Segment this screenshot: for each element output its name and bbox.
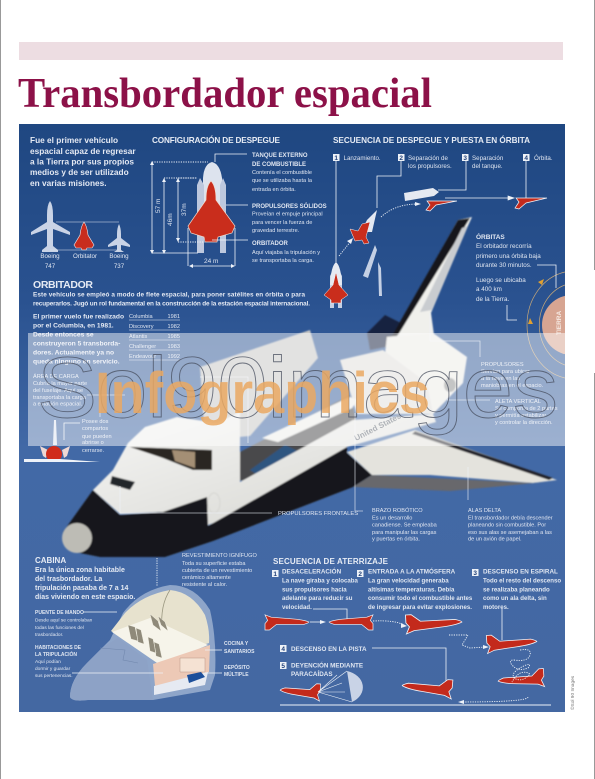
intro text: Fue el primer vehículo — [30, 135, 118, 145]
step 1: 1 — [334, 155, 338, 162]
text: órbitas: El orbitador recorría — [476, 243, 532, 250]
text: propulsores — [481, 362, 558, 426]
label: alas delta: eso sus alas se asemejaban a las — [468, 530, 552, 536]
external tank — [203, 162, 222, 228]
icon: orbiter small — [74, 222, 94, 250]
text: propulsores: Servían para ubicar — [481, 369, 530, 375]
text: órbitas: primero una órbita baja — [476, 253, 541, 260]
text: área de carga — [33, 373, 112, 454]
wing underside — [353, 475, 556, 491]
launch stack small — [324, 262, 348, 308]
step 1 — [333, 154, 381, 162]
aircraft labels: 737 — [114, 263, 125, 270]
text: propulsores: Se componía de 2 partes — [495, 406, 558, 412]
aircraft labels: Boeing — [40, 253, 60, 260]
configuration labels — [252, 153, 327, 264]
configuration labels: PROPULSORES SÓLIDOS — [252, 202, 327, 210]
cabin labels: Aquí podían — [35, 659, 61, 665]
launch sequence diagram — [324, 154, 553, 308]
landing sequence diagram — [265, 609, 551, 705]
step 3: del tanque. — [472, 163, 503, 170]
table: orbiters by year: 1982 — [168, 324, 180, 330]
cabin labels: SANITARIOS — [224, 649, 255, 655]
step 2: Separación de — [408, 155, 448, 162]
black belly — [63, 447, 372, 557]
step 4: 4 — [281, 646, 285, 653]
orbits — [527, 272, 565, 378]
step 4: DESCENSO EN LA PISTA — [291, 646, 367, 653]
size reference lines — [50, 222, 119, 250]
kitchen shelves — [180, 658, 205, 672]
cabin labels: COCINA Y — [224, 641, 249, 647]
solid boosters — [197, 178, 226, 253]
parachute — [318, 671, 363, 702]
cabin labels: sus pertenencias. — [35, 673, 73, 679]
orbiter: on runway approach — [401, 676, 453, 699]
earth label: TIERRA — [556, 310, 563, 335]
orbiter: turned around — [329, 615, 373, 630]
step 5: PARACAÍDAS — [291, 669, 333, 678]
flight deck floor — [112, 618, 208, 665]
leader lines — [212, 154, 248, 240]
heading: configuración de despegue: CONFIGURACIÓN DE DESPEGUE — [152, 134, 281, 145]
spiral — [510, 650, 530, 682]
photo: space shuttle orbiter — [62, 217, 557, 557]
falling boosters — [363, 245, 382, 296]
orbiter — [188, 181, 235, 242]
text: órbitas: de la Tierra. — [476, 296, 509, 303]
table: orbiters by year: 1983 — [168, 344, 180, 350]
configuration labels: TANQUE EXTERNO — [252, 153, 308, 159]
landing step 2 — [357, 566, 473, 611]
configuration labels: DE COMBUSTIBLE — [252, 162, 306, 168]
label: alas delta: planeando sin combustible. Por — [468, 522, 546, 528]
watermark band — [28, 333, 565, 446]
intro text: espacial capaz de regresar — [30, 146, 136, 156]
icon: orbiter front view — [24, 420, 100, 462]
label: alas delta: ALAS DELTA — [468, 508, 501, 514]
dimensions: 24 m — [204, 258, 218, 265]
text: first flight: Desde entonces se — [33, 332, 94, 338]
text: cabina: CABINA — [35, 556, 66, 565]
delta wing — [347, 430, 557, 483]
text: first flight — [33, 314, 124, 366]
step 4: Órbita. — [534, 155, 553, 162]
nose cap — [62, 523, 92, 553]
diagram: cabin cutaway — [70, 585, 222, 701]
lower storage — [154, 672, 208, 695]
photo leader lines — [87, 313, 490, 513]
flight paths — [310, 621, 323, 623]
dimensions: 57 m — [155, 199, 162, 213]
orbiter: atmosphere entry — [405, 612, 462, 634]
text: orbitador: ORBITADOR — [33, 279, 93, 291]
icon: Boeing 737 — [108, 224, 130, 252]
label: brazo robótico: Es un desarrollo — [372, 516, 412, 522]
step 4: 4 — [524, 155, 528, 162]
text: orbitador: recuperarlos. Jugó un rol fundamental en la construcción de la estación espacial internacional. — [33, 300, 310, 308]
text: área de carga: que pueden — [82, 434, 112, 440]
step 2: 2 — [399, 155, 403, 162]
text: área de carga: compartos — [82, 426, 108, 432]
configuration labels: entrada en órbita. — [252, 187, 296, 193]
dimensions: 37m — [181, 203, 188, 216]
text: propulsores: ALETA VERTICAL — [495, 399, 541, 405]
nose section — [70, 638, 153, 701]
step 3: 3 — [463, 155, 467, 162]
dome interior — [111, 590, 209, 660]
text: cabina: tripulación pasaba de 7 a 14 — [35, 585, 128, 592]
cabin labels: Desde aquí se controlaban — [35, 618, 93, 624]
text: propulsores: y permitía estabilizar — [495, 413, 546, 419]
text: área de carga: del fuselaje. Aquí se — [33, 388, 83, 394]
text: área de carga: Cubría la mayor parte — [33, 381, 87, 387]
cabin labels: DEPÓSITO — [224, 663, 250, 671]
landing step 2: ENTRADA A LA ATMÓSFERA — [368, 566, 456, 576]
label: brazo robótico: y puertas en órbita. — [372, 536, 420, 542]
watermark right notch — [565, 270, 595, 373]
step 2 — [398, 154, 452, 170]
rising shuttle — [350, 210, 377, 244]
landing step 3: 3 — [473, 570, 477, 577]
leader lines — [72, 612, 222, 673]
aircraft labels: Orbitator — [73, 253, 97, 260]
watermark outlined text: Sol90images — [37, 340, 558, 436]
seats — [128, 614, 168, 658]
text: orbitador — [33, 279, 310, 308]
table: orbiters by year: Atlantis — [129, 334, 148, 340]
aircraft labels: 747 — [45, 263, 56, 270]
text: órbitas — [476, 232, 541, 303]
label: brazo robótico — [372, 507, 438, 542]
body hatch ring — [208, 493, 220, 513]
orbiter after tank separation — [426, 201, 457, 211]
label: brazo robótico: para manipular las cargas — [372, 530, 437, 536]
storage bags — [187, 672, 205, 683]
text: órbitas: a 400 km — [476, 286, 502, 293]
arrow to orbit — [445, 196, 514, 200]
forward windows — [110, 476, 135, 490]
text: área de carga: cerrarse. — [82, 448, 105, 454]
label: revestimiento ignífugo: REVESTIMIENTO IGNÍFUGO — [182, 552, 257, 559]
text: first flight: por el Columbia, en 1981. — [33, 322, 114, 330]
label: brazo robótico: canadiense. Se empleaba — [372, 522, 438, 528]
earth — [542, 296, 565, 354]
cabin labels: dormir y guardar — [35, 666, 71, 672]
text: orbitador: Este vehículo se empleó a modo de flete espacial, para poner satélites en órbita o para — [33, 292, 305, 298]
configuration labels: Proveían el empuje principal — [252, 212, 323, 218]
cabin labels: MÚLTIPLE — [224, 671, 249, 678]
orbiter: parachute landing — [280, 681, 321, 701]
label: revestimiento ignífugo: resistente al calor. — [182, 582, 228, 588]
table: orbiters by year: Endeavour — [129, 354, 156, 360]
table: orbiters by year: 1992 — [168, 354, 180, 360]
text: área de carga: a estación espacial. — [33, 402, 83, 408]
landing step 1: velocidad. — [282, 604, 312, 611]
intro text: a la Tierra por sus propios — [30, 156, 134, 166]
runway — [280, 704, 551, 706]
size comparison: aircraft — [31, 201, 130, 270]
cabin labels: HABITACIONES DE — [35, 645, 82, 651]
label: revestimiento ignífugo: Toda su superficie estaba — [182, 561, 246, 567]
text: propulsores: maniobras en el espacio. — [481, 383, 544, 389]
text: first flight: construyeron 5 transborda- — [33, 340, 120, 348]
landing step 2: consumir todo el combustible antes — [368, 595, 473, 602]
step 3: Separación — [472, 155, 504, 162]
header band — [19, 42, 563, 60]
text: área de carga: transportaba la carga — [33, 395, 87, 401]
tail fin — [385, 217, 472, 350]
table: orbiters by year: 1981 — [168, 314, 180, 320]
dotted leader to cabin — [156, 558, 158, 586]
orbiter: flying nose forward — [265, 615, 309, 630]
step 4 — [523, 154, 553, 162]
text: cabina: días viviendo en este espacio. — [35, 594, 135, 601]
payload bay door — [200, 330, 318, 440]
cabin labels: PUENTE DE MANDO — [35, 610, 84, 616]
text: first flight: El primer vuelo fue realizado — [33, 314, 124, 320]
intro text — [30, 135, 136, 188]
intro text: medios y de ser utilizado — [30, 167, 129, 177]
orbiter: spiral descent — [497, 669, 545, 690]
text: órbitas: Luego se ubicaba — [476, 277, 526, 284]
orbiter: gliding — [486, 632, 537, 654]
landing step 2: 2 — [358, 571, 362, 578]
text: área de carga: Posee dos — [82, 419, 109, 425]
cabin labels — [35, 610, 255, 679]
landing step 3: Todo el resto del descenso — [483, 578, 561, 584]
landing step 2: de ingresar para evitar explosiones. — [368, 604, 472, 611]
watermark — [28, 270, 595, 446]
configuration labels: gravedad terrestre. — [252, 228, 300, 234]
title: Transbordador espacial — [18, 71, 432, 117]
separated tank — [404, 188, 439, 201]
payload bay interior — [236, 395, 356, 482]
text: área de carga: ÁREA DE CARGA — [33, 373, 79, 380]
open door strip — [262, 397, 358, 442]
text: órbitas: ÓRBITAS — [476, 232, 505, 241]
middeck rooms — [153, 645, 210, 686]
configuration labels: ORBITADOR — [252, 241, 289, 247]
flight path arrows — [339, 204, 418, 256]
dimensions: 46m — [167, 213, 174, 226]
step 3 — [462, 154, 504, 170]
landing step 2: altísimas temperaturas. Debía — [368, 586, 455, 594]
label: alas delta: El transbordador debía descender — [468, 516, 553, 522]
text: propulsores: a la nave en las — [481, 376, 520, 382]
label: propulsores frontales: PROPULSORES FRONTALES — [278, 511, 358, 517]
configuration labels: Contenía el combustible — [252, 170, 312, 176]
text: first flight: dores. Actualmente ya no — [33, 350, 114, 356]
tail shadow — [367, 315, 405, 350]
intro text: en varias misiones. — [30, 178, 107, 188]
credit: ©Sol 90 Images — [569, 675, 576, 710]
landing step 3 — [472, 568, 561, 611]
label: brazo robótico: BRAZO ROBÓTICO — [372, 507, 423, 514]
cabin labels: todas las funciones del — [35, 625, 84, 631]
icon: Boeing 747 — [31, 201, 70, 252]
landing step 1: adelante para reducir su — [282, 595, 353, 602]
text: propulsores: y controlar la dirección. — [495, 420, 553, 426]
"United States" marking: United States — [353, 411, 403, 443]
table: orbiters by year: Columbia — [129, 314, 154, 320]
table: orbiters by year: 1985 — [168, 334, 180, 340]
configuration labels: se transportaba la carga. — [252, 258, 314, 264]
landing step 3: se realizaba planeando — [483, 586, 550, 594]
landing step 3: motores. — [483, 604, 509, 611]
label: revestimiento ignífugo — [182, 552, 257, 588]
step 5: 5 — [281, 663, 285, 670]
leader lines — [336, 161, 526, 262]
dome rib — [162, 590, 170, 630]
label: alas delta — [468, 508, 553, 542]
cabin labels: LA TRIPULACIÓN — [35, 650, 77, 658]
step 2: los propulsores. — [408, 163, 452, 170]
cabin labels: trasbordador. — [35, 632, 63, 638]
diagram: earth and orbits — [506, 264, 565, 378]
engine pods — [340, 333, 467, 414]
text: cabina: Era la única zona habitable — [35, 567, 125, 574]
heading: secuencia de aterrizaje: SECUENCIA DE ATERRIZAJE — [273, 557, 389, 566]
leader lines — [313, 609, 502, 687]
cabin outer shell — [70, 585, 215, 701]
landing step 3: DESCENSO EN ESPIRAL — [483, 568, 558, 576]
configuration labels: para vencer la fuerza de — [252, 220, 312, 226]
landing step 1 — [272, 566, 358, 611]
table: orbiters by year — [129, 314, 180, 360]
label: alas delta: de un avión de papel. — [468, 536, 522, 542]
configuration labels: Aquí viajaba la tripulación y — [252, 250, 320, 256]
label: revestimiento ignífugo: cubierta de un revestimiento — [182, 568, 252, 574]
text: first flight: queda ninguno en servicio. — [33, 358, 120, 366]
step 5: DEYENCIÓN MEDIANTE — [291, 660, 363, 670]
watermark orange text: Infographics — [95, 361, 430, 426]
orbiter in orbit — [515, 198, 547, 209]
wing leading edge stripe — [412, 431, 553, 480]
aircraft labels — [40, 253, 129, 270]
text: órbitas: durante 30 minutos. — [476, 262, 532, 269]
table: orbiters by year: Challenger — [129, 344, 156, 350]
text: propulsores: PROPULSORES — [481, 362, 524, 368]
configuration labels: que se utilizaba hasta la — [252, 178, 313, 184]
diagram: launch stack — [150, 154, 248, 268]
text: cabina: del trasbordador. La — [35, 576, 102, 583]
cockpit windows — [130, 447, 212, 470]
landing step 1: 1 — [273, 571, 277, 578]
landing step 1: La nave giraba y colocaba — [282, 578, 358, 584]
landing step 1: DESACELERACIÓN — [282, 566, 342, 576]
text: cabina — [35, 556, 135, 601]
orbit arrows — [528, 279, 544, 324]
heading: secuencia de despegue: SECUENCIA DE DESPEGUE Y PUESTA EN ÓRBITA — [333, 134, 530, 145]
text: área de carga: abrirse o — [82, 440, 104, 446]
dimensions — [150, 161, 235, 268]
fuselage forward — [93, 412, 436, 525]
table: orbiters by year: Discovery — [129, 324, 154, 330]
landing step 3: como un ala delta, sin — [483, 595, 547, 602]
label: revestimiento ignífugo: cerámico altamente — [182, 575, 231, 581]
main blue panel — [19, 124, 565, 712]
landing step 1: sus propulsores hacia — [282, 586, 347, 594]
aircraft labels: Boeing — [109, 253, 129, 260]
landing step 2: La gran velocidad generaba — [368, 578, 449, 584]
step 5 — [280, 660, 363, 678]
step 1: Lanzamiento. — [344, 155, 381, 162]
